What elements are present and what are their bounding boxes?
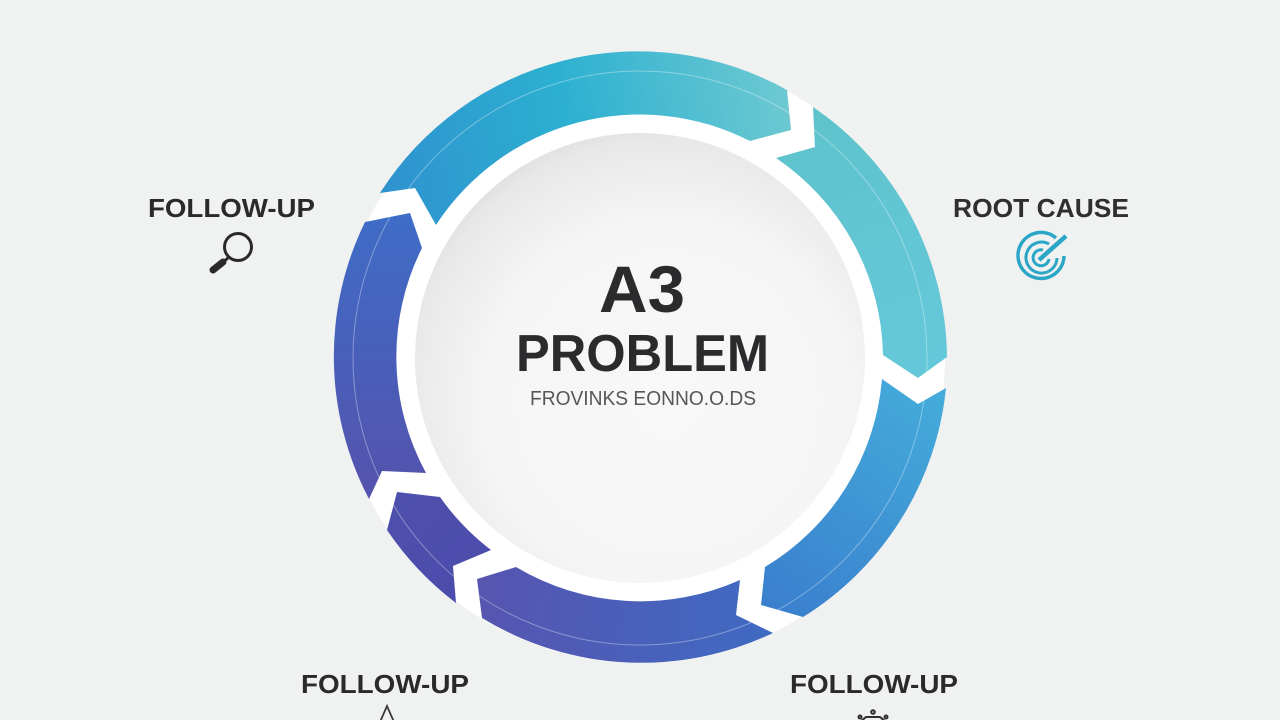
heading: ROOT CAUSE [953,193,1129,223]
subtitle: FROVINKS EONNO.O.DS [530,388,756,410]
segment: bottom [477,567,773,663]
cycle ring diagram [334,51,947,663]
heading: FOLLOW-UP [790,669,958,699]
white ring base [335,53,945,663]
icon: magnifier [213,234,252,270]
center title [516,252,769,410]
label: root cause [953,193,1129,278]
center disc [415,133,865,583]
label: follow-up bottom right [790,669,958,720]
segment: top [380,51,791,225]
heading: FOLLOW-UP [301,669,469,699]
title: PROBLEM: PROBLEM [516,325,769,383]
icon: peak [380,706,394,720]
title: A3: A3 [599,252,685,326]
icon: gear [858,710,888,720]
segment: lower left [387,492,491,603]
heading: FOLLOW-UP [148,193,315,223]
segment: lower right [761,379,946,617]
segment: left [334,213,426,499]
segment: upper right [776,107,947,378]
label: follow-up bottom left [301,669,469,720]
label: follow-up top left [148,193,315,270]
icon: target [1018,232,1066,278]
